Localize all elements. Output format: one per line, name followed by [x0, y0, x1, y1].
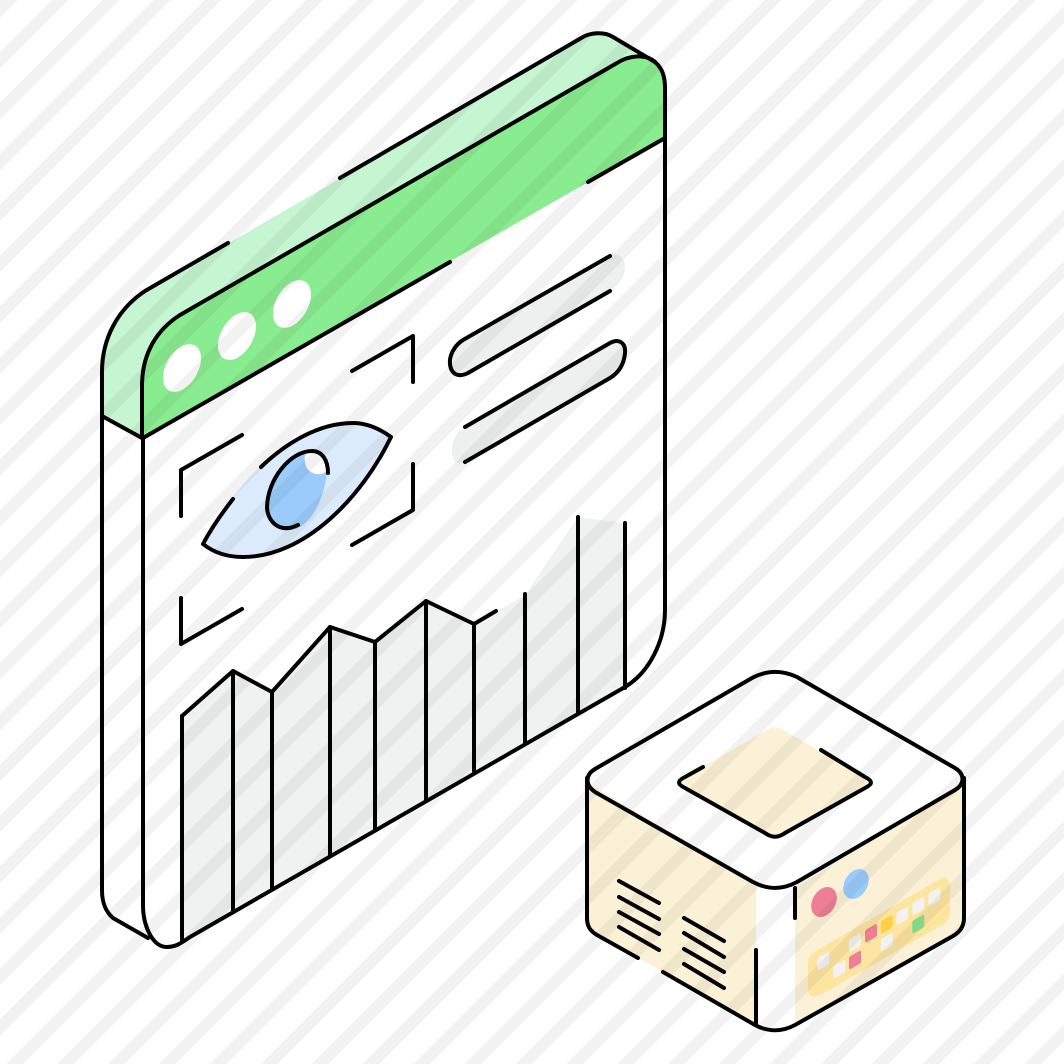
box right face fill	[795, 783, 964, 1025]
keypad keys	[817, 887, 940, 979]
icon: eye	[203, 423, 391, 557]
status lights	[806, 864, 874, 922]
box outlines	[587, 672, 964, 1030]
box left face fill	[587, 783, 756, 1024]
server box illustration	[587, 672, 964, 1030]
text placeholder pills	[450, 254, 625, 463]
window outlines	[102, 33, 665, 947]
focus corner brackets	[181, 336, 413, 644]
window header bar	[142, 56, 665, 438]
chart vertical bars	[182, 517, 625, 941]
window top edge surface	[102, 33, 655, 438]
vent lines	[619, 881, 724, 988]
box top recessed square	[679, 727, 871, 837]
window controls: three dots	[155, 273, 319, 399]
area chart	[182, 517, 625, 941]
keypad panel	[808, 878, 950, 996]
chart trend line	[182, 601, 496, 716]
browser window illustration	[102, 33, 665, 947]
